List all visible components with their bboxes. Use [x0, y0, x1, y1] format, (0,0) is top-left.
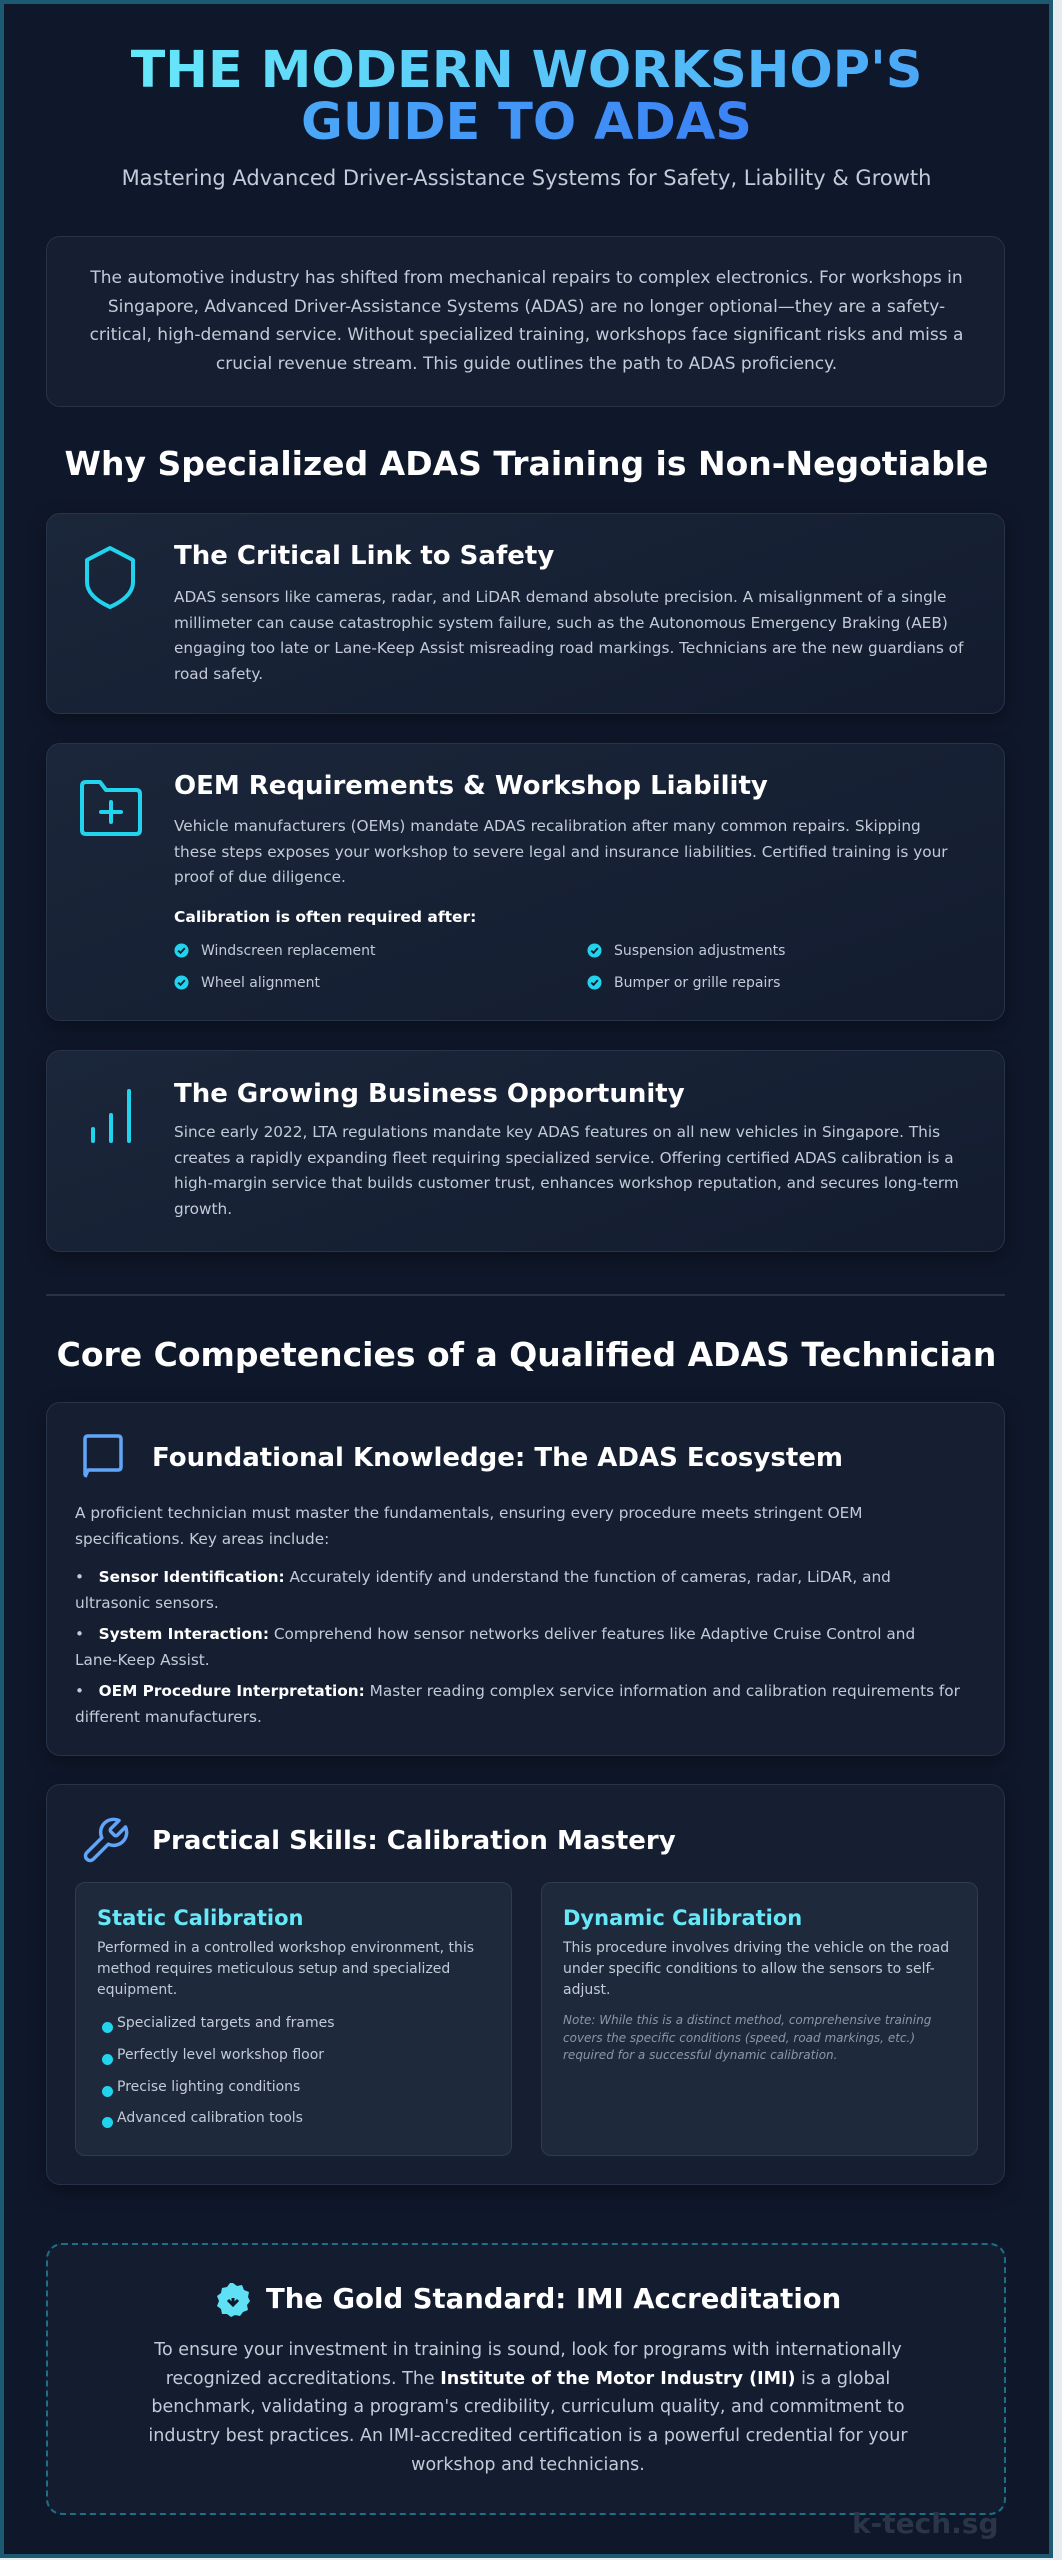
title: The Growing Business Opportunity: [174, 1079, 685, 1109]
title: OEM Requirements & Workshop Liability: [174, 771, 768, 801]
icon: badge: [217, 2283, 250, 2317]
title: Foundational Knowledge: The ADAS Ecosystem: [152, 1443, 843, 1473]
intro panel: [46, 236, 1005, 407]
checklist: Bumper or grille repairs: [614, 975, 780, 991]
sub-panel: dynamic calibration: [541, 1882, 978, 2156]
heading: why training: Why Specialized ADAS Training is Non-Negotiable: [65, 444, 988, 483]
icon: folder plus: [80, 780, 142, 836]
heading: core competencies: Core Competencies of a Qualified ADAS Technician: [57, 1335, 996, 1374]
sub-panel: dynamic calibration: Note: While this is a distinct method, comprehensive training covers the specific conditions (speed, road markings, etc.) required for a successful dynamic calibration.: [563, 2013, 931, 2062]
sub-panel: static calibration: Specialized targets and frames: [117, 2015, 335, 2031]
sub-panel: static calibration: Perfectly level workshop floor: [117, 2047, 324, 2063]
panel: OEM liability: [46, 743, 1005, 1021]
body text: To ensure your investment in training is sound, look for programs with internationally recognized accreditations. The Institute of the Motor Industry (IMI) is a global benchmark, validating a program's credibility, curriculum quality, and commitment to industry best practices. An IMI-accredited certification is a powerful credential for your workshop and technicians.: [148, 2340, 908, 2475]
title: Practical Skills: Calibration Mastery: [152, 1826, 676, 1856]
icon: chat box: [83, 1434, 123, 1478]
title: [131, 41, 922, 152]
sub-panel: static calibration: Performed in a controlled workshop environment, this method requires meticulous setup and specialized equipment.: [97, 1940, 474, 1998]
title: The Critical Link to Safety: [174, 541, 554, 571]
body text: Since early 2022, LTA regulations mandate key ADAS features on all new vehicles in Singapore. This creates a rapidly expanding fleet requiring specialized service. Offering certified ADAS calibration is a high-margin service that builds customer trust, enhances workshop reputation, and secures long-​term growth.: [174, 1123, 959, 1218]
bullet list: [75, 1568, 960, 1726]
title: The Gold Standard: IMI Accreditation: [266, 2283, 841, 2315]
watermark: k-tech.sg: [852, 2507, 998, 2540]
subtitle: Mastering Advanced Driver-Assistance Systems for Safety, Liability & Growth: [122, 166, 931, 190]
checklist: [174, 943, 785, 991]
sub-panel: static calibration: Precise lighting conditions: [117, 2079, 300, 2095]
icon: shield: [85, 546, 135, 609]
sub-panel: dynamic calibration: This procedure involves driving the vehicle on the road under specific conditions to allow the sensors to self-adjust.: [563, 1940, 949, 1998]
bullet list: • System Interaction: Comprehend how sensor networks deliver features like Adaptive Cruise Control and Lane-Keep Assist.: [75, 1625, 915, 1668]
intro panel: The automotive industry has shifted from mechanical repairs to complex electronics. For workshops in Singapore, Advanced Driver-Assistance Systems (ADAS) are no longer optional—they are a safety-​critical, high-demand service. Without specialized training, workshops face significant risks and miss a crucial revenue stream. This guide outlines the path to ADAS proficiency.: [90, 268, 963, 374]
sub-panel: static calibration: [75, 1882, 512, 2156]
panel: business opportunity: [46, 1050, 1005, 1252]
checklist: Wheel alignment: [201, 975, 320, 991]
sub-panel: dynamic calibration: Dynamic Calibration: [563, 1906, 802, 1930]
bullet list: • Sensor Identification: Accurately identify and understand the function of cameras, radar, LiDAR, and ultrasonic sensors.: [75, 1568, 891, 1612]
bullet list: • OEM Procedure Interpretation: Master reading complex service information and calibration requirements for different manufacturers.: [75, 1682, 960, 1726]
checklist: Suspension adjustments: [614, 943, 785, 959]
title: THE MODERN WORKSHOP'S: [131, 41, 922, 100]
sub-panel: static calibration: Static Calibration: [97, 1906, 303, 1930]
title: GUIDE TO ADAS: [301, 93, 752, 152]
panel: foundational knowledge: [46, 1402, 1005, 1756]
body text: Vehicle manufacturers (OEMs) mandate ADAS recalibration after many common repairs. Skipping these steps exposes your workshop to severe legal and insurance liabilities. Certified training is your proof of due diligence.: [174, 817, 948, 886]
checklist heading: Calibration is often required after:: [174, 908, 476, 926]
body text: A proficient technician must master the fundamentals, ensuring every procedure meets stringent OEM specifications. Key areas include:: [75, 1504, 863, 1548]
icon: bar chart: [91, 1089, 131, 1143]
panel: practical skills: [46, 1784, 1005, 2185]
panel: IMI accreditation: [46, 2243, 1006, 2515]
sub-panel: static calibration: Advanced calibration tools: [117, 2110, 303, 2126]
body text: ADAS sensors like cameras, radar, and LiDAR demand absolute precision. A misalignment of a single millimeter can cause catastrophic system failure, such as the Autonomous Emergency Braking (AEB) engaging too late or Lane-Keep Assist misreading road markings. Technicians are the new guardians of road safety.: [174, 588, 963, 682]
checklist: Windscreen replacement: [201, 943, 376, 959]
panel: safety: [46, 513, 1005, 714]
icon: wrench: [84, 1818, 128, 1862]
